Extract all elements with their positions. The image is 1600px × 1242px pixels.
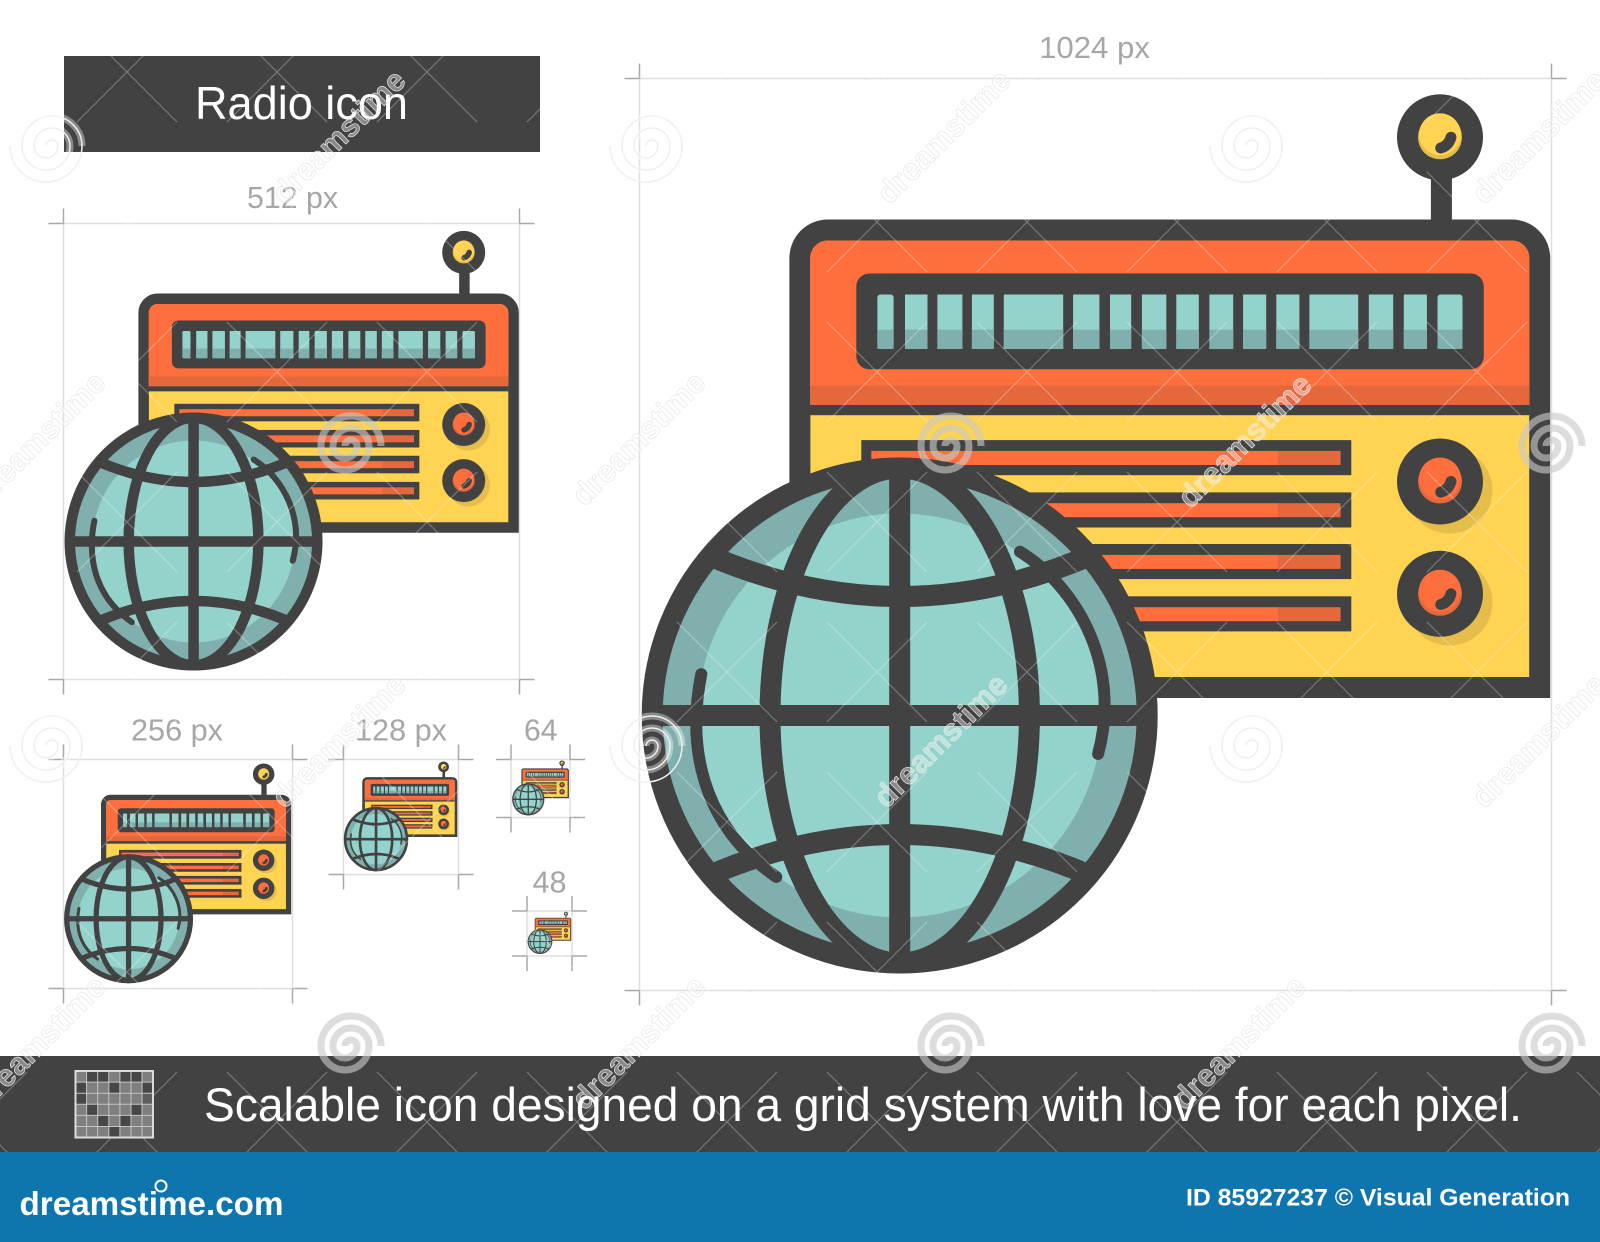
watermark overlay: dreamstime xyxy=(265,667,412,814)
icon: radio and globe, 48 px xyxy=(528,912,571,953)
size label: 1024 px: 1024 px xyxy=(1039,30,1150,65)
logo: dreamstime.com: dreamstime.com xyxy=(20,1185,284,1222)
frame: 1024 px xyxy=(624,64,1566,1006)
icon: radio and globe, 128 px xyxy=(345,761,456,870)
watermark overlay: dreamstime xyxy=(1171,367,1318,514)
footer bar xyxy=(0,1056,1600,1152)
watermark overlay: dreamstime xyxy=(867,667,1014,814)
watermark overlay: dreamstime xyxy=(565,365,712,512)
frame: 256 px xyxy=(48,744,308,1004)
watermark overlay: dreamstime xyxy=(870,63,1017,210)
size label: 128 px: 128 px xyxy=(355,712,447,748)
size label: 512 px: 512 px xyxy=(247,180,338,215)
watermark overlay: dreamstime xyxy=(565,969,712,1116)
brand bar xyxy=(0,1152,1600,1242)
icon: radio and globe, 64 px xyxy=(513,760,568,815)
watermark overlay: dreamstime xyxy=(1165,969,1312,1116)
frame: 512 px xyxy=(48,208,534,694)
size label: 48: 48 xyxy=(532,864,566,900)
title banner: Radio icon xyxy=(195,77,408,129)
icon: pixel grid xyxy=(76,1071,153,1138)
frame: 64 px xyxy=(496,744,585,832)
size label: 256 px: 256 px xyxy=(131,712,223,748)
image credit: ID 85927237 © Visual Generation xyxy=(1186,1184,1570,1212)
footer tagline: Scalable icon designed on a grid system with love for each pixel. xyxy=(204,1078,1522,1131)
icon: radio and globe, 512 px xyxy=(70,231,514,665)
icon: radio and globe, 256 px xyxy=(67,763,289,981)
title banner xyxy=(64,56,540,152)
size label: 64: 64 xyxy=(524,712,558,748)
watermark overlay: dreamstime xyxy=(265,63,412,210)
frame: 128 px xyxy=(328,744,474,890)
icon: radio and globe, 1024 px xyxy=(652,94,1540,963)
frame: 48 px xyxy=(512,896,587,971)
